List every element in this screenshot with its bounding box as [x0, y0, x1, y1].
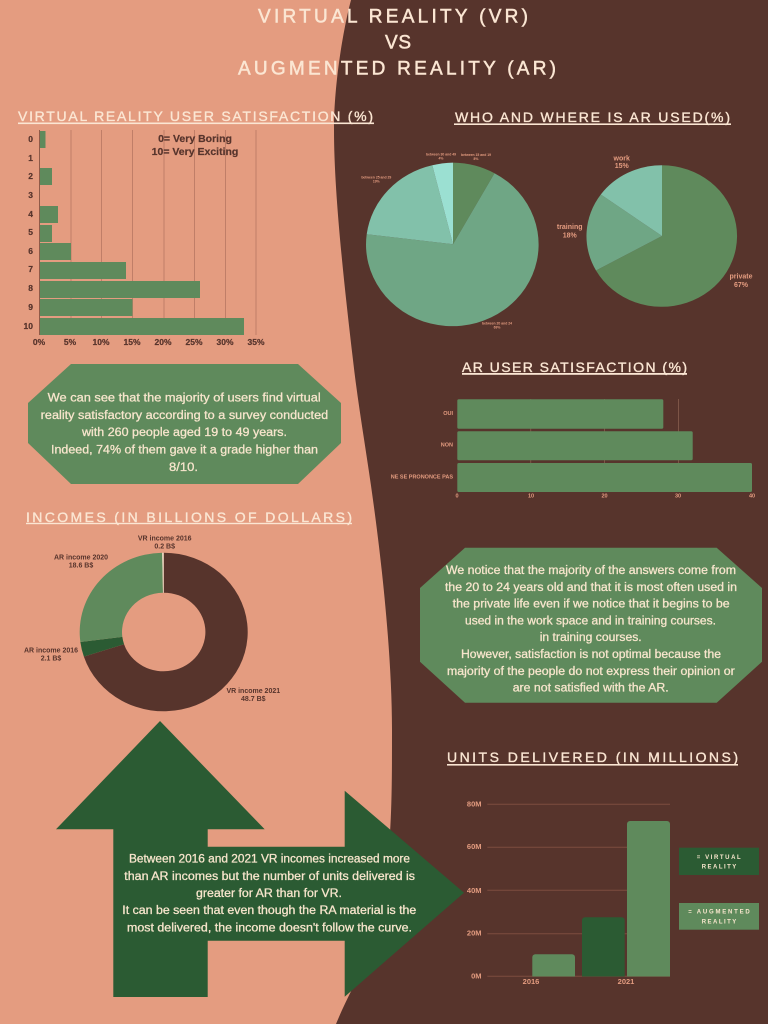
- chart labels: percent axis: 15%: [123, 337, 141, 347]
- callout: AR survey summary: are not satisfied with the AR.: [513, 680, 669, 694]
- pie labels: usage contexts: training: [557, 224, 583, 231]
- chart legend: grade scale note: [152, 133, 238, 158]
- pie labels: usage contexts: private: [730, 274, 753, 280]
- chart labels: millions axis: 0M: [471, 972, 482, 980]
- pie labels: age groups: between 25 and 29: [361, 176, 391, 180]
- title: [238, 6, 556, 80]
- bar chart: units delivered bars: [532, 821, 670, 976]
- chart labels: percent axis: 25%: [185, 337, 203, 347]
- chart labels: grade axis: [24, 134, 33, 331]
- chart labels: percent axis: 10%: [92, 337, 110, 347]
- heading: units delivered: UNITS DELIVERED (IN MILLIONS): [447, 749, 738, 765]
- legend: virtual reality: = VIRTUAL: [697, 855, 741, 861]
- chart labels: grade axis: 5: [28, 227, 33, 237]
- panel: incomes: [24, 509, 352, 711]
- chart labels: value axis: 10: [528, 494, 534, 500]
- donut labels: VR income 2021: [226, 688, 280, 695]
- chart labels: millions axis: [467, 800, 482, 980]
- callout: VR survey summary: 8/10.: [169, 460, 198, 474]
- title: VIRTUAL REALITY (VR): [258, 6, 528, 28]
- chart labels: percent axis: [33, 337, 265, 347]
- callout: AR survey summary: the private life even if we notice that it begins to be: [453, 596, 730, 610]
- pie labels: usage contexts: [557, 156, 753, 289]
- chart labels: percent axis: 35%: [247, 337, 265, 347]
- chart labels: millions axis: 40M: [467, 886, 482, 895]
- legend: virtual reality: [679, 848, 759, 875]
- donut labels: AR income 2020: [54, 555, 108, 562]
- callout: AR survey summary: However, satisfaction is not optimal because the: [461, 647, 721, 661]
- callout: AR survey summary: in training courses.: [540, 630, 642, 644]
- callout: VR survey summary: Indeed, 74% of them gave it a grade higher than: [51, 442, 318, 456]
- background: brown curved right side: [334, 0, 768, 1024]
- chart labels: value axis: 20: [601, 494, 608, 500]
- panel: VR user satisfaction: [18, 108, 374, 347]
- callout: VR survey summary: [28, 364, 341, 484]
- legend: augmented reality: REALITY: [702, 919, 736, 925]
- panel: AR user satisfaction: [391, 359, 755, 500]
- donut labels: 48.7 B$: [241, 696, 266, 703]
- pie labels: age groups: between 30 and 49: [426, 153, 456, 157]
- callout: VR survey summary: with 260 people aged 19 to 49 years.: [81, 425, 287, 439]
- pie chart: AR usage context: [586, 165, 737, 307]
- donut labels: [24, 536, 280, 703]
- pie chart: AR users by age: [366, 163, 539, 326]
- callout: AR survey summary: used in the work space and in training courses.: [465, 614, 716, 628]
- pie labels: usage contexts: 18%: [563, 232, 577, 240]
- chart labels: value axis: 30: [675, 494, 681, 500]
- chart labels: grade axis: 1: [28, 153, 33, 163]
- chart labels: grade axis: 7: [28, 264, 33, 274]
- chart labels: years: 2021: [618, 977, 634, 986]
- donut labels: AR income 2016: [24, 647, 78, 654]
- arrow text: most delivered, the income doesn't follow the curve.: [127, 920, 412, 934]
- chart labels: answers: OUI: [443, 411, 453, 417]
- chart labels: millions axis: 60M: [467, 842, 482, 851]
- donut labels: 18.6 B$: [69, 563, 93, 570]
- chart labels: value axis: 40: [749, 494, 755, 500]
- callout: VR survey summary: reality satisfactory according to a survey conducted: [41, 408, 328, 422]
- panel: who and where AR is used: [361, 109, 753, 330]
- chart labels: grade axis: 9: [28, 302, 33, 312]
- pie labels: usage contexts: 15%: [615, 163, 629, 170]
- chart labels: answers: [391, 411, 453, 481]
- chart labels: grade axis: 8: [28, 283, 33, 293]
- panel: units delivered: [447, 749, 759, 986]
- chart labels: answers: NE SE PRONONCE PAS: [391, 475, 453, 481]
- chart labels: grade axis: 4: [28, 209, 33, 219]
- chart labels: years: [523, 977, 634, 986]
- pie labels: age groups: 69%: [494, 326, 500, 330]
- chart labels: percent axis: 5%: [64, 337, 77, 347]
- chart labels: percent axis: 0%: [33, 337, 46, 347]
- chart labels: grade axis: 10: [24, 321, 33, 331]
- chart labels: value axis: [455, 494, 755, 500]
- legend: augmented reality: = AUGMENTED: [688, 909, 750, 915]
- bar chart: VR satisfaction bars: [40, 131, 244, 335]
- arrow text: It can be seen that even though the RA material is the: [122, 903, 416, 917]
- legend: virtual reality: REALITY: [702, 865, 736, 871]
- title: AUGMENTED REALITY (AR): [238, 58, 556, 80]
- donut labels: VR income 2016: [138, 536, 192, 543]
- pie labels: usage contexts: work: [613, 156, 630, 162]
- callout: AR survey summary: [420, 548, 762, 703]
- chart labels: percent axis: 20%: [154, 337, 172, 347]
- chart labels: answers: NON: [441, 443, 453, 449]
- arrow text: [122, 852, 416, 934]
- pie labels: age groups: [361, 153, 512, 330]
- pie labels: usage contexts: 67%: [734, 282, 749, 289]
- pie labels: age groups: 8%: [474, 157, 478, 161]
- legend: augmented reality: [679, 903, 759, 930]
- chart labels: years: 2016: [523, 977, 539, 986]
- arrow text: than AR incomes but the number of units delivered is: [124, 869, 415, 883]
- heading: incomes: INCOMES (IN BILLIONS OF DOLLARS): [26, 509, 352, 525]
- donut chart: incomes: [80, 553, 248, 711]
- heading: AR user satisfaction: AR USER SATISFACTION (%): [462, 359, 687, 375]
- heading: VR user satisfaction: VIRTUAL REALITY USER SATISFACTION (%): [18, 108, 373, 124]
- chart labels: grade axis: 0: [28, 134, 33, 144]
- callout: double arrow with income conclusion: [56, 721, 464, 997]
- chart labels: percent axis: 30%: [216, 337, 234, 347]
- chart labels: millions axis: 20M: [467, 928, 482, 938]
- donut labels: 2.1 B$: [41, 655, 61, 662]
- arrow: up and right: [56, 721, 464, 997]
- arrow text: Between 2016 and 2021 VR incomes increased more: [129, 852, 410, 866]
- arrow text: greater for AR than for VR.: [196, 886, 342, 900]
- pie labels: age groups: 19%: [373, 180, 380, 184]
- chart labels: grade axis: 2: [28, 171, 33, 181]
- chart labels: grade axis: 6: [28, 246, 33, 256]
- chart labels: grade axis: 3: [28, 190, 33, 200]
- callout: AR survey summary: We notice that the majority of the answers come from: [446, 563, 736, 577]
- donut labels: 0.2 B$: [154, 544, 175, 551]
- callout: AR survey summary: majority of the people do not express their opinion or: [447, 664, 735, 678]
- callout: VR survey summary: We can see that the majority of users find virtual: [48, 390, 321, 404]
- pie labels: age groups: between 15 and 19: [461, 153, 491, 157]
- chart labels: value axis: 0: [455, 494, 459, 500]
- pie labels: age groups: between 20 and 24: [482, 322, 512, 326]
- chart legend: grade scale note: 10= Very Exciting: [152, 146, 238, 158]
- callout: AR survey summary: the 20 to 24 years old and that it is most often used in: [445, 580, 737, 594]
- heading: who and where: WHO AND WHERE IS AR USED(%): [455, 109, 730, 125]
- bar chart: AR satisfaction bars: [457, 399, 752, 492]
- chart legend: grade scale note: 0= Very Boring: [158, 133, 232, 145]
- pie labels: age groups: 4%: [439, 157, 443, 161]
- title: VS: [385, 32, 411, 54]
- chart labels: millions axis: 80M: [467, 800, 482, 808]
